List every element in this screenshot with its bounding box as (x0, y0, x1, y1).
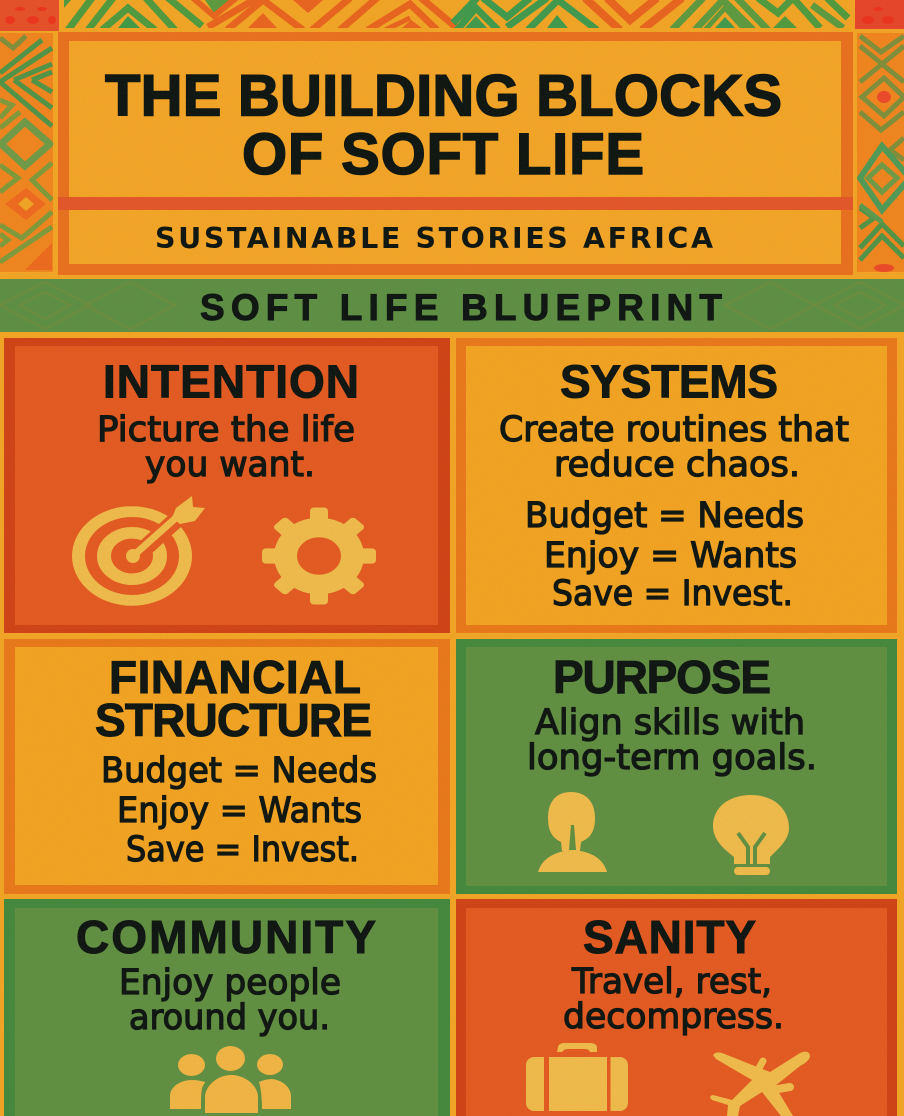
title: OF SOFT LIFE (242, 122, 644, 187)
panel: sanity (456, 899, 897, 1116)
heading: systems: SYSTEMS (560, 356, 778, 408)
heading: financial structure: FINANCIAL (109, 651, 361, 703)
text: intention body: you want. (145, 445, 315, 485)
text: financial list: Budget = Needs (101, 751, 377, 791)
text: community body: around you. (129, 998, 330, 1038)
icon: airplane (710, 1052, 810, 1116)
blueprint banner: SOFT LIFE BLUEPRINT (200, 287, 722, 328)
heading: sanity: SANITY (583, 911, 756, 963)
heading: purpose: PURPOSE (553, 651, 771, 703)
title (105, 64, 782, 187)
text: purpose body: Align skills with (535, 703, 805, 743)
top pattern strip (0, 0, 904, 31)
text: financial list: Save = Invest. (126, 830, 359, 870)
text: systems body (499, 410, 849, 485)
text: systems list: Save = Invest. (552, 574, 793, 614)
icon: suitcase (526, 1043, 628, 1111)
heading: financial structure (95, 651, 372, 746)
left side pattern (0, 32, 53, 272)
text: purpose body: long-term goals. (527, 738, 817, 778)
icon: person (538, 792, 607, 872)
subtitle: SUSTAINABLE STORIES AFRICA (155, 222, 713, 255)
text: intention body (97, 410, 355, 485)
icon: gear (262, 508, 376, 604)
text: community body (119, 963, 341, 1038)
text: systems list: Enjoy = Wants (544, 536, 797, 576)
text: purpose body (527, 703, 817, 778)
text: systems body: Create routines that (499, 410, 849, 450)
text: sanity body: decompress. (563, 997, 784, 1037)
panel: intention (4, 338, 450, 633)
text: community body: Enjoy people (119, 963, 341, 1003)
panel: systems (456, 338, 897, 633)
panel: financial structure (4, 639, 450, 894)
icon: target with arrow (78, 496, 205, 600)
icon: light bulb (713, 795, 789, 875)
text: financial list (101, 751, 377, 870)
text: systems list (525, 496, 804, 614)
panel: community (4, 899, 450, 1116)
panel: purpose (456, 639, 897, 894)
text: sanity body (563, 962, 784, 1037)
text: intention body: Picture the life (97, 410, 355, 450)
text: sanity body: Travel, rest, (571, 962, 772, 1002)
icon: people group (170, 1046, 291, 1113)
right side pattern (857, 32, 904, 272)
blueprint banner (0, 279, 904, 332)
text: systems body: reduce chaos. (554, 445, 800, 485)
heading: community: COMMUNITY (76, 911, 376, 963)
title: THE BUILDING BLOCKS (105, 64, 782, 128)
heading: financial structure: STRUCTURE (95, 694, 372, 746)
heading: intention: INTENTION (103, 356, 359, 408)
text: financial list: Enjoy = Wants (117, 791, 362, 831)
text: systems list: Budget = Needs (525, 496, 804, 536)
header panel (58, 32, 853, 275)
